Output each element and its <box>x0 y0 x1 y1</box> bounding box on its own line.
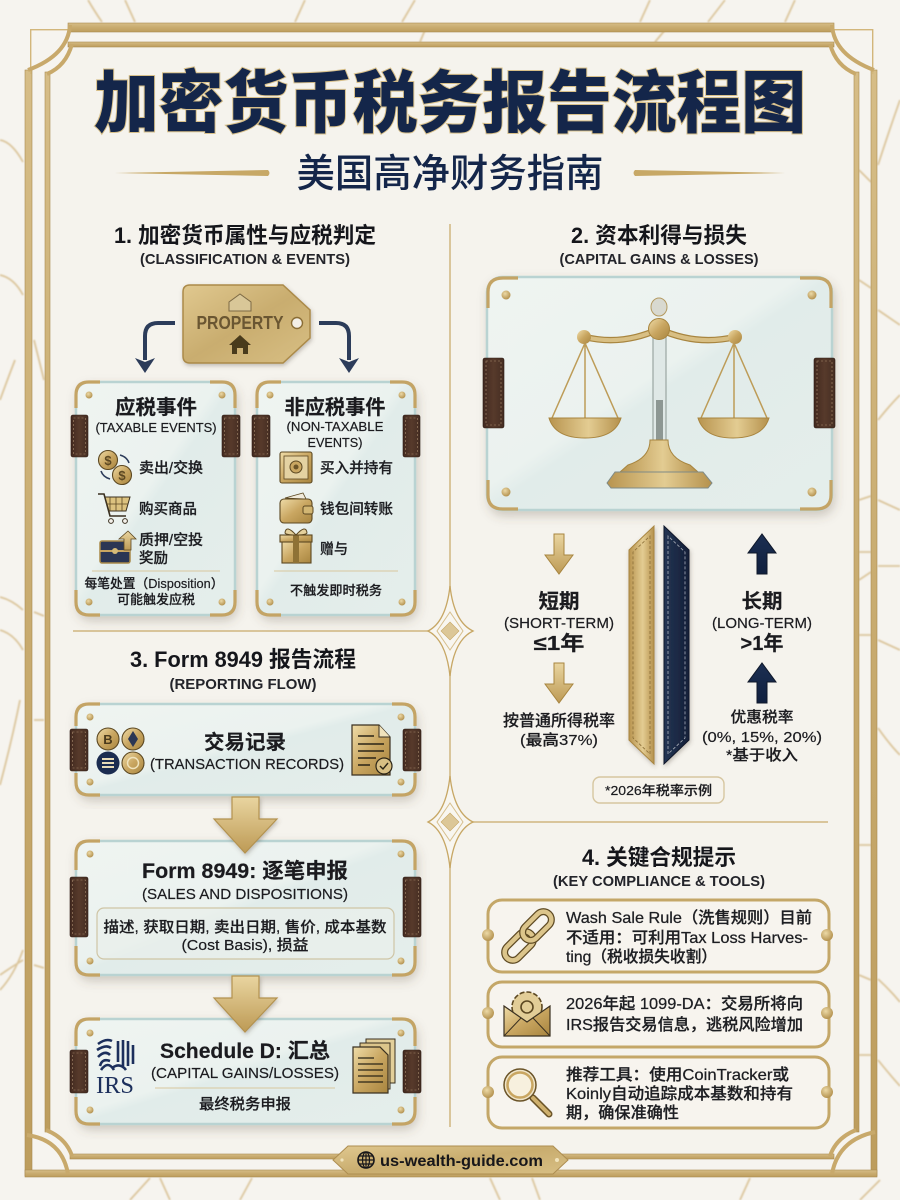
heading: section 3 <box>130 647 356 693</box>
arrow: long-term rate <box>748 663 776 703</box>
subtitle <box>115 153 785 196</box>
panel: taxable events: 奖励 <box>139 550 168 567</box>
panel: non-taxable events: 赠与 <box>320 541 348 558</box>
short-term column: 按普通所得税率 <box>503 711 615 730</box>
detail box: form fields <box>97 908 394 959</box>
icon: magnifier <box>504 1069 549 1114</box>
heading: section 4: (KEY COMPLIANCE & TOOLS) <box>553 873 765 890</box>
long-term column: *基于收入 <box>726 747 798 764</box>
panel: taxable events: 卖出/交换 <box>139 459 204 477</box>
arrow: to taxable <box>135 323 175 373</box>
card: transaction records: 交易记录 <box>204 730 286 754</box>
panel: section 3 reporting flow <box>70 647 421 1124</box>
heading: section 3: (REPORTING FLOW) <box>170 676 317 693</box>
long-term column: 优惠税率 <box>730 709 794 726</box>
icon: safe <box>280 452 312 483</box>
card: schedule D: Schedule D: 汇总 <box>160 1040 330 1063</box>
arrow: short-term rate <box>545 663 573 703</box>
card: wash sale rule: Wash Sale Rule（洗售规则）目前 <box>566 909 812 927</box>
icon: document with check <box>352 725 392 775</box>
card: recommended tools: 期，确保准确性 <box>566 1104 679 1122</box>
panel: non-taxable events: (NON-TAXABLE <box>286 419 384 434</box>
note: 2026 rates <box>593 777 724 803</box>
icon: treasure chest with arrow <box>100 531 136 563</box>
card: recommended tools: 推荐工具：使用CoinTracker或 <box>566 1066 789 1084</box>
property tag <box>183 285 310 363</box>
heading: section 1: 1. 加密货币属性与应税判定 <box>114 223 376 248</box>
footer badge <box>333 1146 568 1174</box>
heading: section 4: 4. 关键合规提示 <box>582 845 736 870</box>
icon: gift <box>280 529 312 563</box>
icon: crypto coins: B <box>103 732 113 747</box>
card: form 8949: (SALES AND DISPOSITIONS) <box>142 886 348 903</box>
panel: non-taxable events: 非应税事件 <box>284 395 386 419</box>
panel: non-taxable events: 买入并持有 <box>320 460 393 477</box>
heading: section 2: 2. 资本利得与损失 <box>571 223 747 248</box>
heading: section 3: 3. Form 8949 报告流程 <box>130 647 356 672</box>
arrow: form 8949 to schedule D <box>214 976 277 1032</box>
arrow: to non-taxable <box>319 323 359 373</box>
short-term column: 短期 <box>538 590 580 613</box>
card: schedule D: 最终税务申报 <box>199 1096 291 1113</box>
icon: coin exchange <box>98 450 132 484</box>
panel: taxable events: (TAXABLE EVENTS) <box>96 420 216 435</box>
icon: balance scale <box>549 298 769 488</box>
icon: IRS logo <box>96 1040 134 1099</box>
card: 1099-DA: 2026年起 1099-DA：交易所将向 <box>566 994 803 1013</box>
panel: taxable events: 每笔处置（Disposition） <box>84 576 224 591</box>
icon: document stack <box>353 1039 395 1093</box>
panel: non-taxable events: 钱包间转账 <box>320 500 394 518</box>
panel: section 2 capital gains <box>483 223 835 803</box>
icon: crypto coins <box>96 728 144 774</box>
card: schedule D <box>70 1019 421 1124</box>
arrow: short-term down <box>545 534 573 574</box>
property tag: PROPERTY <box>196 313 284 333</box>
detail box: form fields: (Cost Basis), 损益 <box>182 937 308 954</box>
card: wash sale rule: ting（税收损失收割） <box>566 948 717 966</box>
panel: taxable events <box>71 382 240 615</box>
card: 1099-DA <box>482 982 833 1047</box>
leather bands <box>629 526 689 764</box>
panel: glass scale plate <box>483 277 835 510</box>
long-term column: >1年 <box>740 632 784 655</box>
heading: section 1: (CLASSIFICATION & EVENTS) <box>140 251 350 268</box>
long-term column <box>702 534 822 764</box>
panel: section 4 compliance <box>482 845 833 1128</box>
card: wash sale rule: 不适用：可利用Tax Loss Harves- <box>566 929 808 947</box>
short-term column: ≤1年 <box>534 632 584 655</box>
card: transaction records: (TRANSACTION RECORDS) <box>150 756 344 773</box>
short-term column: (SHORT-TERM) <box>504 615 614 632</box>
note: 2026 rates: *2026年税率示例 <box>605 783 712 798</box>
panel: section 1 classification <box>71 223 420 615</box>
detail box: form fields: 描述, 获取日期, 卖出日期, 售价, 成本基数 <box>104 919 386 936</box>
panel: taxable events: 应税事件 <box>115 395 197 419</box>
long-term column: (0%, 15%, 20%) <box>702 729 822 746</box>
short-term column: (最高37%) <box>520 732 598 749</box>
dividers with ornaments <box>73 224 828 1127</box>
card: form 8949: Form 8949: 逐笔申报 <box>142 860 348 883</box>
footer badge: us-wealth-guide.com <box>380 1153 543 1170</box>
icon: wallet <box>280 493 313 523</box>
icon: IRS logo: IRS <box>96 1073 134 1099</box>
panel: non-taxable events: 不触发即时税务 <box>290 583 382 598</box>
panel: taxable events: 质押/空投 <box>139 531 203 549</box>
icon: shopping cart <box>98 494 130 523</box>
card: schedule D: (CAPITAL GAINS/LOSSES) <box>151 1065 339 1082</box>
card: transaction records <box>70 704 421 795</box>
card: recommended tools: Koinly自动追踪成本基数和持有 <box>566 1085 793 1103</box>
icon: coin exchange: $ <box>118 468 126 483</box>
title: 加密货币税务报告流程图 <box>94 66 806 142</box>
panel: taxable events: 购买商品 <box>139 501 197 518</box>
card: wash sale rule <box>482 900 833 972</box>
icon: coin exchange: $ <box>104 453 112 468</box>
long-term column: (LONG-TERM) <box>712 615 812 632</box>
long-term column: 长期 <box>742 590 782 613</box>
icon: chain link <box>501 908 555 964</box>
subtitle: 美国高净财务指南 <box>296 153 604 196</box>
card: form 8949 <box>70 841 421 975</box>
panel: non-taxable events <box>252 382 420 615</box>
arrow: records to form 8949 <box>214 797 277 853</box>
heading: section 1 <box>114 223 376 268</box>
panel: non-taxable events: EVENTS) <box>308 435 362 450</box>
heading: section 2 <box>560 223 758 268</box>
icon: globe <box>358 1152 374 1168</box>
icon: envelope with gear <box>504 992 550 1036</box>
card: recommended tools <box>482 1057 833 1128</box>
card: 1099-DA: IRS报告交易信息，逃税风险增加 <box>566 1015 803 1034</box>
panel: taxable events: 可能触发应税 <box>117 592 195 607</box>
short-term column <box>503 534 615 749</box>
heading: section 4 <box>553 845 765 890</box>
heading: section 2: (CAPITAL GAINS & LOSSES) <box>560 251 758 268</box>
arrow: long-term up <box>748 534 776 574</box>
